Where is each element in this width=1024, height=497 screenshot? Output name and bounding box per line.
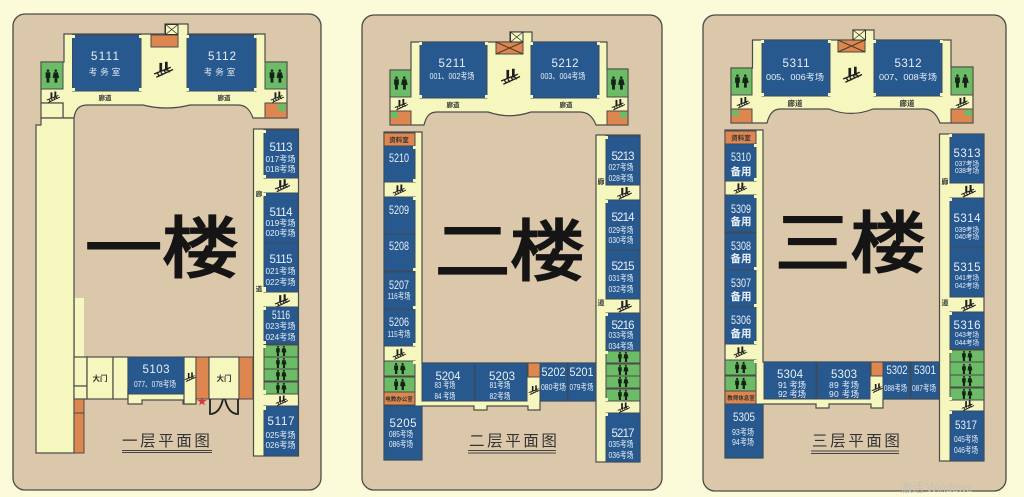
right stairs 3 — [276, 395, 288, 406]
room 5215: 031考场 — [608, 273, 634, 283]
third floor wing corridor — [731, 30, 973, 123]
room 5117: 026考场 — [266, 440, 296, 450]
right stairs — [612, 99, 625, 110]
room 5217: 5217 — [612, 428, 634, 440]
left wing — [384, 132, 596, 460]
entrance hall — [209, 357, 239, 399]
room 5315: 042考场 — [955, 281, 979, 290]
room 5312 — [874, 40, 942, 96]
room 5111 — [72, 35, 141, 91]
stairs in bottom wing — [529, 385, 540, 395]
room 5310: 备用 — [730, 165, 752, 178]
room 5317 — [950, 411, 984, 461]
main entrance label: 大门 — [92, 373, 108, 383]
corridor labels — [788, 98, 915, 108]
room 5202 — [540, 363, 568, 401]
room 5115: 5115 — [270, 254, 292, 266]
room 5115: 021考场 — [266, 266, 296, 276]
room 5314: 039考场 — [955, 225, 979, 234]
restroom row — [264, 345, 298, 394]
right stairs 2 — [275, 294, 290, 307]
room 5215: 032考场 — [608, 284, 634, 294]
corridor label right — [942, 177, 948, 307]
room 5306: 备用 — [730, 327, 752, 340]
room 5210 — [384, 146, 415, 182]
room 5117: 5117 — [268, 416, 294, 428]
room 5112 — [187, 35, 256, 91]
corridor labels: 廊道 — [788, 98, 803, 108]
corridor label right — [598, 177, 604, 307]
room 5302: 5302 — [886, 365, 908, 377]
corridor labels: 廊道 — [560, 100, 573, 109]
right wing — [596, 135, 640, 462]
room 5304: 91 考场 — [778, 380, 806, 390]
room 5302: 088考场 — [884, 383, 907, 393]
right orange room — [265, 103, 287, 118]
room 5209: 5209 — [389, 205, 409, 217]
orange room with cross — [496, 42, 523, 54]
left stairs — [737, 97, 750, 108]
room 5213 — [606, 136, 640, 185]
room 5213: 028考场 — [608, 173, 634, 183]
room 5103 — [128, 357, 184, 394]
room 5309: 5309 — [731, 204, 751, 216]
room 5202: 080考场 — [541, 382, 566, 392]
elevator — [166, 24, 178, 34]
right stairs 1 — [961, 185, 976, 197]
room 5214 — [606, 200, 640, 250]
room 5311 — [762, 40, 830, 96]
right restroom — [951, 67, 973, 95]
teacher lounge: 教师休息室 — [727, 394, 755, 402]
room 5204: 5204 — [436, 371, 461, 383]
stairs beside 5103 — [185, 372, 196, 382]
room 5303: 90 考场 — [829, 389, 859, 399]
central staircase — [154, 62, 173, 77]
corridor label right — [256, 189, 263, 293]
room 5206: 115考场 — [388, 329, 410, 339]
room 5307: 备用 — [730, 290, 752, 303]
right stairs 3 — [618, 402, 630, 413]
room 5305: 94考场 — [732, 437, 754, 447]
room 5111: 考务室 — [89, 67, 123, 77]
corridor labels: 廊道 — [900, 98, 915, 108]
left wing — [725, 130, 939, 458]
restroom row — [606, 351, 640, 401]
room 5214: 030考场 — [608, 235, 634, 245]
small orange room — [528, 363, 540, 377]
room 5210: 5210 — [389, 153, 409, 165]
room 5211: 5211 — [438, 58, 466, 70]
room 5205: 086考场 — [389, 439, 413, 449]
room 5116: 024考场 — [266, 332, 296, 342]
orange room right of door — [239, 357, 253, 399]
right restroom — [265, 62, 287, 89]
room 5216: 033考场 — [608, 330, 634, 340]
room 5209 — [384, 197, 415, 234]
room 5315 — [950, 247, 984, 297]
room 5217: 036考场 — [608, 450, 634, 460]
first floor top wing corridor — [41, 24, 287, 118]
room 5317: 046考场 — [954, 445, 978, 455]
room 5113: 018考场 — [266, 164, 296, 174]
left stairs 1 — [734, 183, 747, 193]
room 5212: 003、004考场 — [540, 71, 586, 81]
room 5114 — [264, 193, 298, 243]
panel: third floor — [703, 15, 1006, 491]
room 5314: 5314 — [954, 213, 981, 225]
entrance hall: 大门 — [216, 373, 232, 383]
restroom row — [950, 350, 984, 400]
room 5203: 5203 — [489, 371, 515, 383]
central staircase — [843, 67, 862, 82]
room 5204: 84 考场 — [434, 391, 456, 401]
room 5303 — [817, 362, 870, 399]
room 5314: 040考场 — [955, 232, 979, 241]
resource room: 资料室 — [389, 135, 409, 144]
floor plan title: 一层平面图 — [122, 433, 213, 450]
door notches — [754, 40, 952, 414]
room 5211: 001、002考场 — [430, 71, 474, 81]
elevator — [853, 30, 866, 40]
small orange room — [871, 362, 883, 376]
room 5115: 022考场 — [266, 277, 296, 287]
left restroom — [731, 68, 752, 95]
floor name: 一楼 — [85, 212, 239, 287]
room 5303: 89 考场 — [829, 380, 859, 390]
left stairs 2 — [393, 349, 406, 359]
entrance doors — [210, 399, 238, 414]
audio visual office: 电教办公室 — [385, 395, 413, 403]
second floor wing corridor — [390, 32, 628, 125]
corridor labels — [98, 93, 231, 102]
room 5216: 5216 — [612, 320, 634, 332]
left restrooms — [725, 360, 756, 391]
room 5316: 044考场 — [955, 338, 979, 347]
corridor label right: 廊 — [256, 189, 263, 198]
room 5306: 5306 — [731, 315, 751, 327]
room 5103: 077、078考场 — [134, 379, 176, 389]
right stairs 1 — [275, 179, 290, 192]
room 5205 — [384, 406, 422, 460]
room 5203 — [475, 363, 527, 401]
right restroom — [607, 69, 628, 97]
teacher lounge — [725, 391, 756, 404]
room 5214: 029考场 — [608, 225, 634, 235]
room 5307: 5307 — [731, 278, 751, 290]
room 5216 — [606, 313, 640, 351]
floor name: 三楼 — [775, 207, 926, 282]
room 5314 — [950, 198, 984, 247]
room 5213: 027考场 — [608, 162, 634, 172]
right orange room — [607, 111, 628, 125]
room 5317: 045考场 — [954, 434, 978, 444]
room 5312: 5312 — [894, 58, 922, 70]
room 5303: 5303 — [831, 369, 857, 381]
room 5307 — [725, 270, 756, 307]
room 5217: 035考场 — [608, 439, 634, 449]
first floor left storage box — [41, 103, 63, 118]
room 5113: 5113 — [270, 142, 292, 154]
resource room — [384, 133, 415, 146]
room 5308 — [725, 233, 756, 270]
room 5306 — [725, 307, 756, 344]
room 5117 — [264, 406, 298, 456]
room 5313: 038考场 — [955, 166, 979, 175]
room 5316: 5316 — [954, 320, 980, 332]
right stairs 1 — [617, 187, 632, 199]
room 5308: 备用 — [730, 252, 752, 265]
room 5207 — [384, 272, 415, 309]
room 5112: 5112 — [208, 51, 236, 63]
watermark: 激活 Windows — [901, 481, 972, 495]
room 5313 — [950, 134, 984, 183]
star marker: ★ — [197, 397, 207, 408]
room 5111: 5111 — [91, 51, 119, 63]
left restrooms — [384, 361, 415, 392]
room 5203: 82考场 — [490, 391, 510, 401]
room 5309 — [725, 195, 756, 232]
corridor label right: 道 — [942, 298, 948, 307]
room 5115 — [264, 243, 298, 292]
room 5113: 017考场 — [266, 154, 296, 164]
orange utility room — [151, 35, 178, 47]
floor name: 二楼 — [435, 215, 585, 290]
corridor labels: 廊道 — [98, 93, 112, 102]
right stairs — [956, 97, 969, 108]
corridor label right: 廊 — [598, 177, 604, 186]
room 5305: 5305 — [733, 412, 755, 424]
elevator — [510, 32, 523, 42]
room 5301: 5301 — [914, 365, 936, 377]
room 5114: 020考场 — [266, 228, 296, 238]
corridor labels: 廊道 — [446, 100, 460, 109]
room 5213: 5213 — [612, 151, 634, 163]
room 5114: 019考场 — [266, 218, 296, 228]
corridor label right: 道 — [598, 298, 604, 307]
room 5310: 5310 — [731, 152, 751, 164]
room 5308: 5308 — [731, 241, 751, 253]
room 5211 — [420, 42, 487, 98]
corridor label right: 道 — [256, 284, 263, 293]
room 5304 — [764, 362, 816, 399]
room 5317: 5317 — [955, 420, 977, 432]
room 5310 — [725, 144, 756, 181]
panel: first floor — [13, 14, 321, 490]
resource room — [725, 131, 756, 144]
room 5206: 5206 — [389, 317, 409, 329]
floor plan title: 二层平面图 — [469, 433, 560, 450]
room 5208 — [384, 234, 415, 271]
room 5201 — [568, 363, 596, 401]
door notches — [413, 42, 608, 416]
resource room: 资料室 — [731, 133, 751, 142]
room 5316 — [950, 312, 984, 349]
panel: second floor — [362, 15, 662, 490]
bottom wing — [74, 298, 196, 404]
room 5116: 023考场 — [266, 321, 296, 331]
room 5201: 079考场 — [570, 382, 594, 392]
floor plan title: 三层平面图 — [812, 433, 903, 450]
right stairs — [271, 92, 284, 102]
right stairs 3 — [962, 400, 974, 411]
room 5113 — [264, 130, 298, 178]
room 5214: 5214 — [612, 212, 635, 224]
right stairs 2 — [961, 299, 976, 311]
room 5312: 007、008考场 — [879, 72, 937, 82]
room 5112: 考务室 — [204, 67, 238, 77]
left stairs 1 — [393, 185, 406, 195]
room 5305 — [725, 404, 763, 458]
left stairs 2 — [734, 347, 747, 357]
room 5302 — [883, 362, 910, 399]
corridor labels: 廊道 — [218, 93, 231, 102]
left stairs — [47, 92, 60, 102]
room 5216: 034考场 — [608, 341, 634, 351]
central staircase — [501, 69, 520, 84]
room 5202: 5202 — [542, 367, 566, 379]
orange rooms lower left — [74, 399, 84, 453]
door notches — [72, 35, 266, 410]
orange room with cross — [838, 40, 865, 52]
right wing — [940, 134, 984, 461]
room 5205: 085考场 — [389, 429, 413, 439]
left restroom — [41, 62, 63, 89]
room 5207: 116考场 — [388, 291, 410, 301]
right orange room — [951, 109, 973, 123]
room 5304: 5304 — [777, 369, 804, 381]
room 5204: 83 考场 — [434, 380, 456, 390]
room 5103: 5103 — [142, 364, 170, 376]
left restroom — [390, 70, 411, 97]
room 5301 — [911, 362, 939, 399]
left orange room — [390, 111, 411, 125]
room 5206 — [384, 309, 415, 346]
room 5315: 5315 — [954, 262, 980, 274]
room 5311: 005、006考场 — [766, 72, 824, 82]
room 5215 — [606, 250, 640, 299]
room 5116 — [264, 307, 298, 344]
stairs in bottom wing — [872, 383, 883, 393]
orange room near door — [196, 357, 209, 399]
room 5215: 5215 — [612, 261, 634, 273]
room 5204 — [422, 363, 474, 401]
right stairs 2 — [617, 300, 632, 312]
room 5201: 5201 — [570, 367, 594, 379]
room 5301: 087考场 — [912, 383, 936, 393]
room 5203: 81考场 — [490, 380, 510, 390]
room 5313: 037考场 — [955, 159, 979, 168]
room 5309: 备用 — [730, 215, 752, 228]
room 5114: 5114 — [270, 207, 293, 219]
room 5212 — [531, 42, 599, 98]
room 5207: 5207 — [389, 280, 409, 292]
right wing — [254, 129, 298, 456]
room 5208: 5208 — [389, 241, 409, 253]
room 5117: 025考场 — [266, 430, 296, 440]
room 5311: 5311 — [782, 58, 810, 70]
room 5316: 043考场 — [955, 330, 979, 339]
first floor left long strip — [36, 118, 74, 453]
room 5313: 5313 — [954, 148, 980, 160]
room 5212: 5212 — [552, 58, 578, 70]
room 5116: 5116 — [272, 310, 290, 322]
room 5205: 5205 — [390, 418, 416, 430]
corridor labels — [446, 100, 573, 109]
room 5217 — [606, 413, 640, 462]
corridor label right: 廊 — [942, 177, 948, 186]
left stairs — [395, 99, 408, 110]
room 5315: 041考场 — [955, 273, 979, 282]
room 5305: 93考场 — [732, 427, 754, 437]
left orange room — [731, 109, 752, 123]
room 5304: 92 考场 — [778, 389, 806, 399]
audio visual office — [384, 392, 415, 405]
